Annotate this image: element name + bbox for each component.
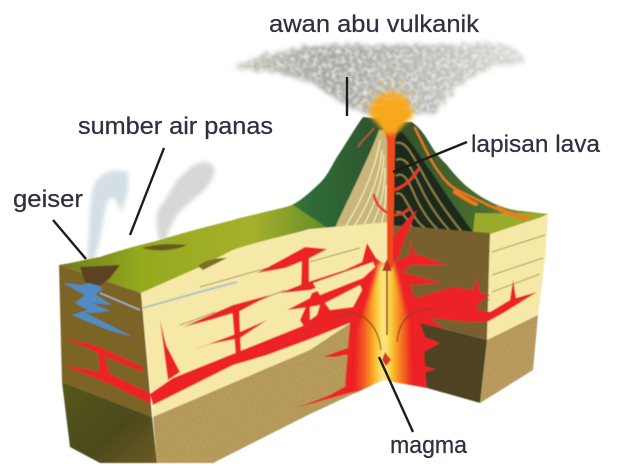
- label: sumber air panas: sumber air panas: [78, 113, 273, 140]
- magma dyke from the cone to the rock: [393, 210, 417, 262]
- layered lines, right cut: [396, 143, 462, 232]
- hot water layer, left side: [63, 281, 237, 337]
- sills on front left face: [150, 243, 386, 408]
- hot spring vent: [142, 244, 187, 250]
- dark lower rock, left side: [62, 382, 157, 463]
- sills on left side face: [63, 337, 151, 404]
- sandy rock, right side face: [480, 315, 538, 403]
- left side face: [59, 265, 152, 417]
- cream blocks among the sills: [310, 262, 375, 320]
- steam plume: hot spring: [156, 162, 215, 242]
- ash cloud: [234, 44, 526, 114]
- grass surface right: [473, 213, 548, 235]
- grass surface left: [59, 205, 335, 293]
- cream strata, right side face: [487, 215, 548, 340]
- dark patch near cream: [198, 258, 227, 270]
- leader lines: [53, 77, 467, 432]
- steam plume: geyser: [86, 171, 128, 266]
- cut of the cone, dark right strata: [393, 132, 473, 232]
- label: magma: magma: [390, 432, 468, 459]
- lava flows on the right slope: [415, 128, 530, 218]
- volcano cone right slope: [392, 122, 548, 240]
- magma central column: [355, 263, 412, 395]
- cream strata, front left face: [141, 222, 390, 417]
- cut of the cone, left strata: [333, 130, 390, 235]
- sills on the right front face: [388, 240, 537, 395]
- magma network: [63, 240, 537, 408]
- dark brown rock, right front face: [390, 225, 490, 340]
- magma conduit: [381, 118, 400, 268]
- lava stream on the left slope: [358, 128, 374, 147]
- magma branches in the cone: [374, 170, 418, 215]
- dark lower rock, right front face: [420, 323, 487, 403]
- eruption fountain: [360, 75, 420, 134]
- label: awan abu vulkanik: awan abu vulkanik: [269, 11, 480, 38]
- geyser vent: [80, 265, 120, 286]
- crack lines: [180, 235, 545, 325]
- label: geiser: geiser: [13, 186, 83, 213]
- volcano cone left slope: [235, 117, 392, 235]
- label: lapisan lava: lapisan lava: [471, 131, 601, 158]
- sandy rock, front left face: [153, 300, 384, 463]
- layered lines, left cut: [342, 140, 386, 234]
- magma arrows: [338, 259, 433, 366]
